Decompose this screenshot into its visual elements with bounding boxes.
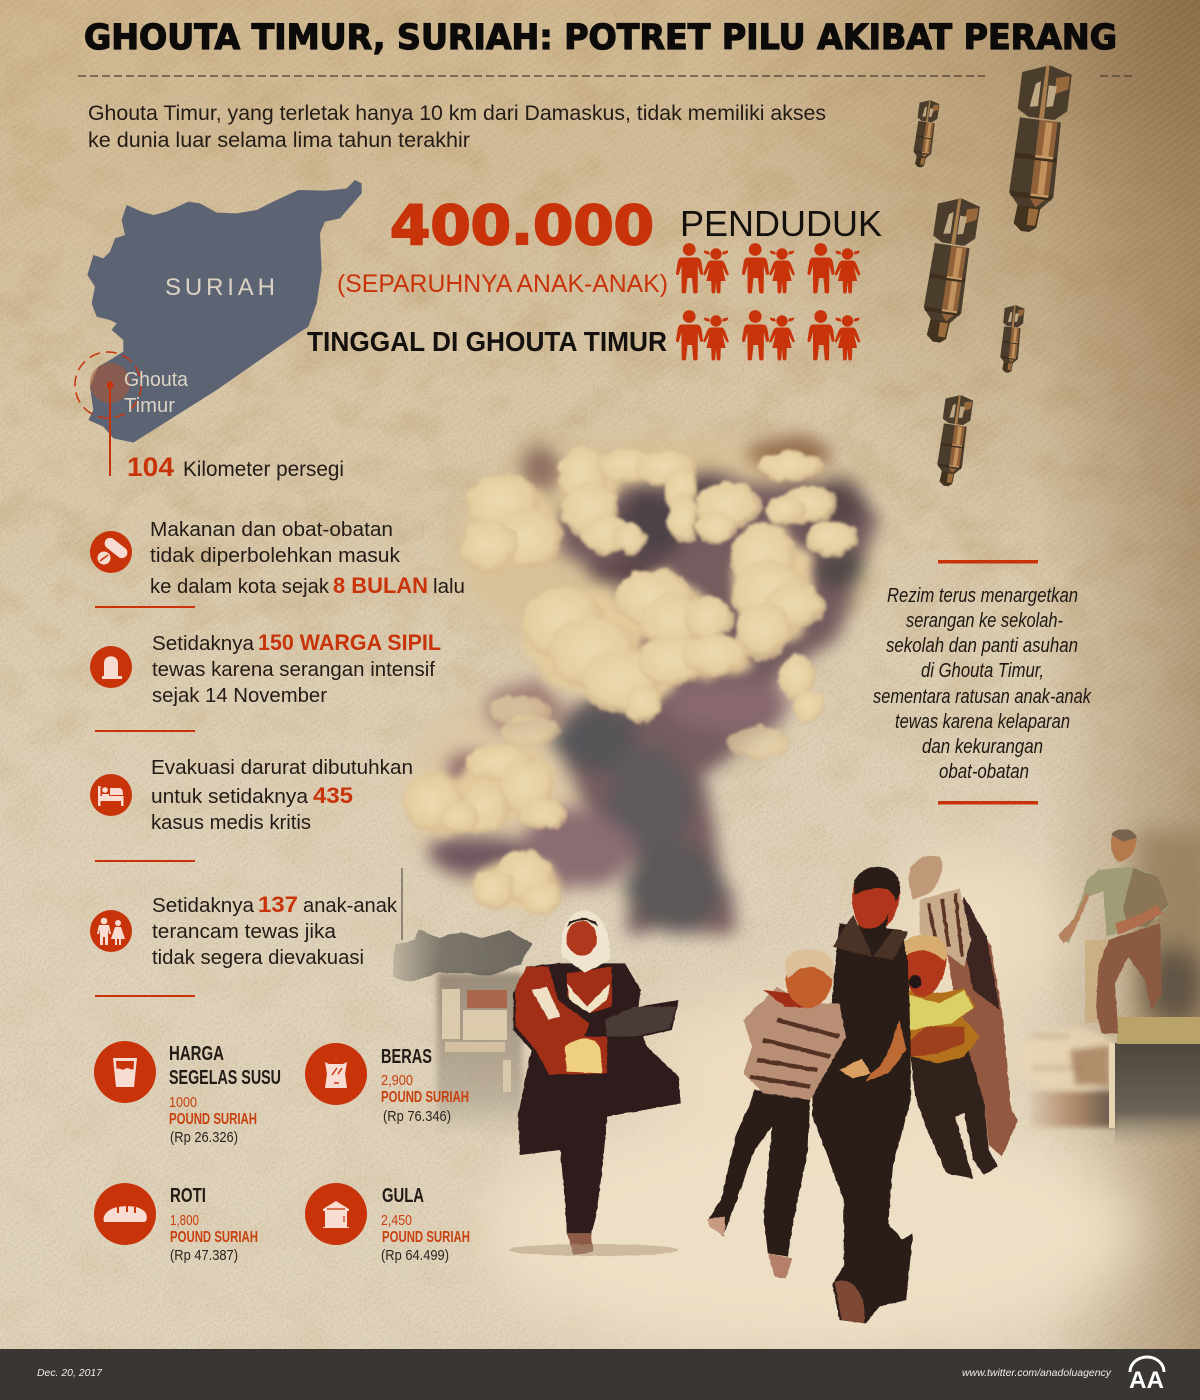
price: milk: (Rp 26.326) xyxy=(170,1129,238,1146)
lamp post xyxy=(401,868,403,940)
marker dashed ring xyxy=(75,352,141,418)
text: Makanan dan obat-obatan xyxy=(150,519,393,541)
price: rice: (Rp 76.346) xyxy=(383,1108,451,1125)
man in centre xyxy=(812,867,913,1323)
top rule xyxy=(938,560,1038,564)
callout text: sementara ratusan anak-anak xyxy=(873,686,1092,708)
text: 435 xyxy=(313,783,353,808)
subtitle: (SEPARUHNYA ANAK-ANAK) xyxy=(337,270,668,298)
text: 137 xyxy=(258,892,298,917)
boy right in yellow shirt xyxy=(886,935,998,1178)
area stat: Kilometer persegi xyxy=(183,458,344,481)
intro text xyxy=(88,102,826,152)
background climbing man xyxy=(1058,829,1168,1033)
text: BERAS xyxy=(381,1046,432,1068)
cloud cream masses xyxy=(407,455,813,910)
price: bread xyxy=(94,1183,258,1264)
text xyxy=(151,757,413,834)
price: sugar xyxy=(305,1183,470,1264)
map label: SURIAH xyxy=(165,274,275,301)
callout text: Rezim terus menargetkan xyxy=(887,585,1078,607)
building right xyxy=(1109,1017,1200,1148)
text xyxy=(152,630,441,707)
marker label: Timur xyxy=(124,395,175,417)
intro text: Ghouta Timur, yang terletak hanya 10 km dari Damaskus, tidak memiliki akses xyxy=(88,102,826,125)
fact: food and medicine xyxy=(90,519,465,598)
icons: adults and children xyxy=(676,243,860,360)
ruined street left xyxy=(392,930,533,1138)
price: bread: POUND SURIAH xyxy=(170,1229,258,1246)
icon: bomb lower xyxy=(934,393,974,488)
text xyxy=(150,519,465,598)
price: bread: 1,800 xyxy=(170,1212,199,1229)
price: milk xyxy=(94,1041,281,1146)
icon: loaf of bread xyxy=(94,1183,156,1245)
icon: bomb small top xyxy=(911,99,940,169)
icon: bomb small middle xyxy=(998,304,1025,374)
text: kasus medis kritis xyxy=(151,812,311,834)
source url: www.twitter.com/anadoluagency xyxy=(962,1367,1112,1379)
icon: pills xyxy=(90,531,132,573)
area stat: 104 xyxy=(127,452,174,482)
intro text: ke dunia luar selama lima tahun terakhir xyxy=(88,129,470,152)
price: milk: SEGELAS SUSU xyxy=(169,1067,281,1089)
icon: rice sack xyxy=(305,1043,367,1105)
date: Dec. 20, 2017 xyxy=(37,1367,103,1379)
cloud shadows xyxy=(430,437,877,933)
callout text: obat-obatan xyxy=(939,761,1029,783)
icon: children xyxy=(90,910,132,952)
panel: food prices xyxy=(94,1041,470,1264)
boy left in striped shirt xyxy=(708,949,906,1278)
price: milk: POUND SURIAH xyxy=(169,1111,257,1128)
text: Evakuasi darurat dibutuhkan xyxy=(151,757,413,779)
icon: hospital bed xyxy=(90,774,132,816)
price: rice xyxy=(305,1043,469,1125)
population stat xyxy=(307,194,882,360)
callout text: tewas karena kelaparan xyxy=(895,711,1070,733)
text: anak-anak xyxy=(303,895,398,917)
callout text: di Ghouta Timur, xyxy=(921,660,1044,682)
map of Syria with Ghouta Timur marker xyxy=(75,180,362,482)
panel: humanitarian facts xyxy=(90,519,465,997)
marker label xyxy=(124,369,189,417)
title: GHOUTA TIMUR, SURIAH: POTRET PILU AKIBAT PERANG xyxy=(84,18,1117,58)
logo: Anadolu Agency: AA xyxy=(1129,1367,1164,1394)
area stat xyxy=(127,452,344,482)
light dust ground xyxy=(480,850,1140,1355)
label: PENDUDUK xyxy=(680,203,882,244)
text: Setidaknya xyxy=(152,633,255,655)
text: 8 BULAN xyxy=(333,573,428,598)
text: tidak diperbolehkan masuk xyxy=(150,545,401,567)
text: GULA xyxy=(382,1185,424,1207)
subtitle 2: TINGGAL DI GHOUTA TIMUR xyxy=(307,326,667,357)
bottom rule xyxy=(938,801,1038,804)
woman carrying child xyxy=(509,910,681,1256)
map shape xyxy=(87,180,362,443)
text: tewas karena serangan intensif xyxy=(152,659,435,681)
dashed title rule xyxy=(78,75,1136,77)
text: lalu xyxy=(433,576,465,598)
price: sugar: (Rp 64.499) xyxy=(381,1247,449,1264)
marker area xyxy=(90,363,130,403)
price: rice: POUND SURIAH xyxy=(381,1089,469,1106)
bombs falling xyxy=(911,62,1073,488)
text: 150 WARGA SIPIL xyxy=(258,630,441,655)
fact: civilians killed xyxy=(90,630,441,707)
callout text: serangan ke sekolah- xyxy=(906,610,1063,632)
callout: regime targets schools xyxy=(873,560,1092,804)
icon: bomb medium xyxy=(918,195,981,346)
callout text: dan kekurangan xyxy=(922,736,1043,758)
text: Setidaknya xyxy=(152,895,255,917)
text: ROTI xyxy=(170,1185,206,1207)
icon: glass of milk xyxy=(94,1041,156,1103)
old man behind xyxy=(908,856,1018,1157)
text: ke dalam kota sejak xyxy=(150,576,330,598)
text: tidak segera dievakuasi xyxy=(152,947,364,969)
icon: gravestone xyxy=(90,646,132,688)
icon: bomb large xyxy=(1003,62,1073,235)
rubble right xyxy=(1020,1028,1120,1127)
speckled wall right xyxy=(1135,830,1200,1040)
marker pin xyxy=(109,385,111,476)
text: untuk setidaknya xyxy=(151,786,309,808)
footer bar xyxy=(0,1349,1200,1400)
text: HARGA xyxy=(169,1043,224,1065)
big number: 400.000 xyxy=(390,194,654,257)
scene: fleeing civilians xyxy=(392,829,1200,1355)
cloud glow xyxy=(407,437,867,893)
mushroom cloud xyxy=(403,437,877,933)
price: sugar: 2,450 xyxy=(381,1212,412,1229)
callout text: sekolah dan panti asuhan xyxy=(886,635,1078,657)
icon: sugar bag xyxy=(305,1183,367,1245)
text: terancam tewas jika xyxy=(152,921,337,943)
fact: medical evacuation xyxy=(90,757,413,834)
price: rice: 2,900 xyxy=(381,1072,413,1089)
cloud billows xyxy=(403,447,858,915)
fact: children at risk xyxy=(90,892,398,969)
callout text xyxy=(873,585,1092,783)
price: sugar: POUND SURIAH xyxy=(382,1229,470,1246)
marker label: Ghouta xyxy=(124,369,189,391)
price: milk: 1000 xyxy=(169,1094,197,1111)
price: bread: (Rp 47.387) xyxy=(170,1247,238,1264)
text xyxy=(152,892,398,969)
text: sejak 14 November xyxy=(152,685,327,707)
